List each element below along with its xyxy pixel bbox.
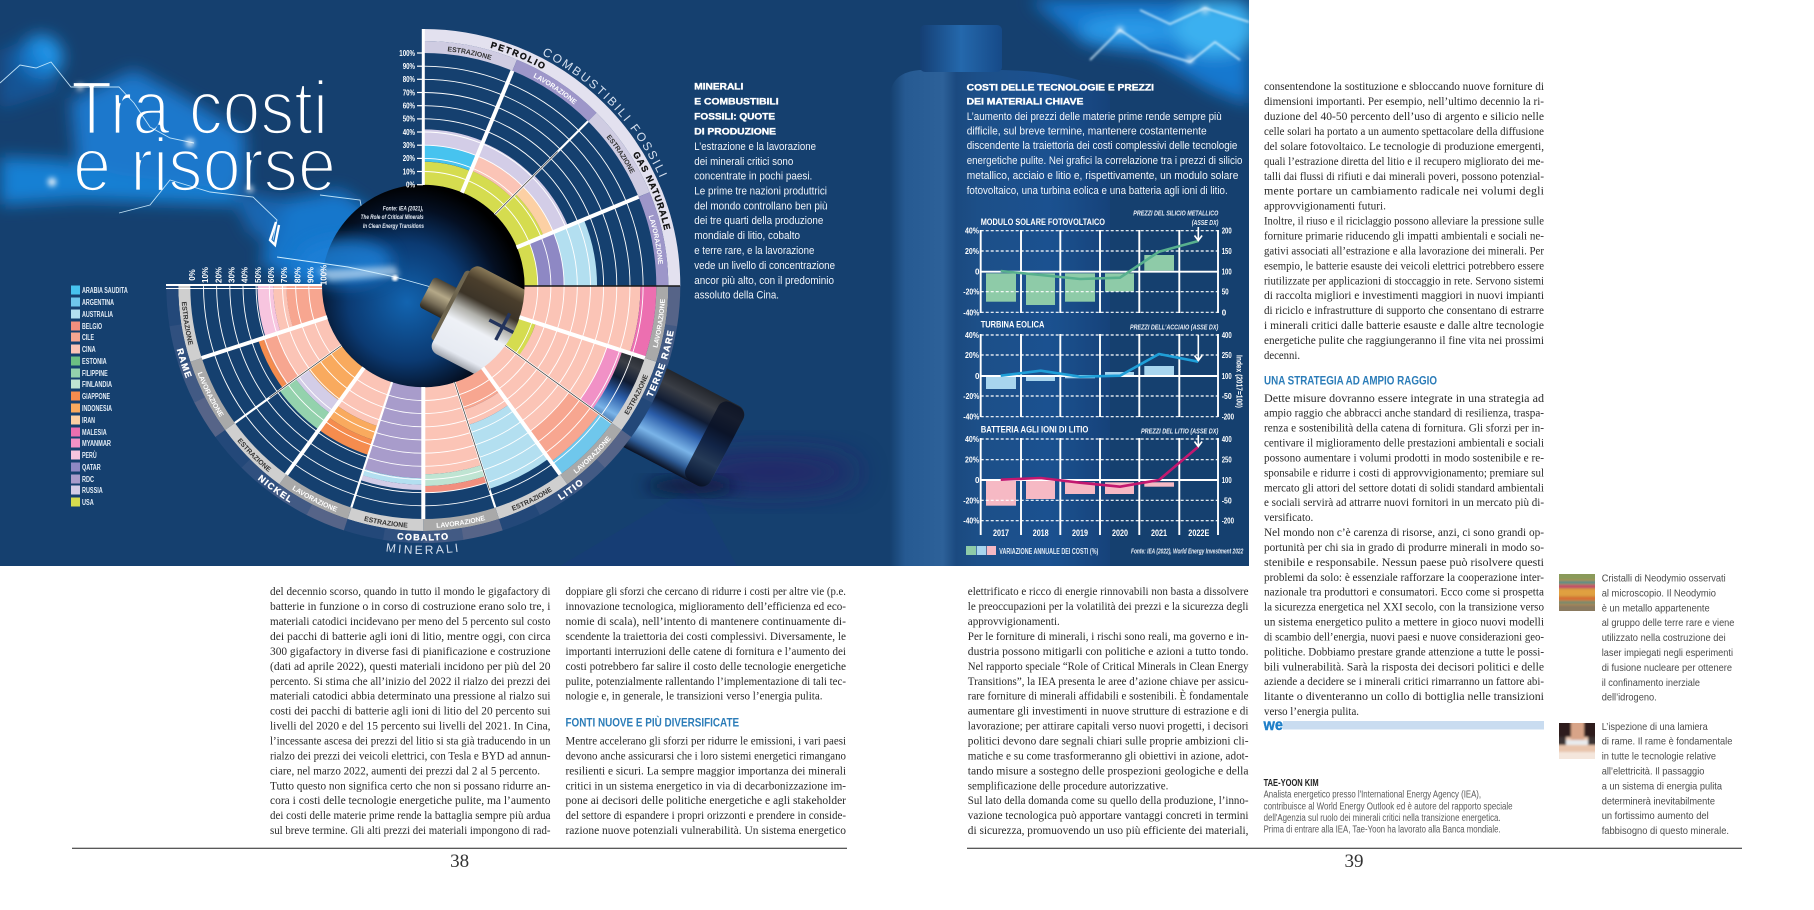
year labels <box>993 528 1209 538</box>
heading <box>694 82 779 138</box>
article text: page 39 column 2 top <box>1264 79 1545 362</box>
legend: countries: ARABIA SAUDITA <box>82 286 128 295</box>
article text: page 39 column 2 bottom: politiche. Dobbiamo prestare grande attenzione a tutte le possi- <box>1264 644 1544 658</box>
axis labels: lower percent scale: 30% <box>227 267 236 283</box>
rim labels: minerals: LAVORAZIONE <box>652 299 665 348</box>
footer page 38: 38 <box>450 851 469 872</box>
chart: batteria agli ioni di litio: BATTERIA AGLI IONI DI LITIO <box>981 424 1088 435</box>
axis labels: upper percent scale: 10% <box>403 167 415 176</box>
article text: page 39 column 2 bottom: Dette misure dovranno essere integrate in una strategia ad <box>1264 391 1544 405</box>
article text: page 38 column 2: del settore di espandere i propri orizzonti e prendere in conside- <box>566 808 846 822</box>
article text: page 38 column 1: costi dei pacchi di batterie agli ioni di litio del 20 percento sui <box>270 704 551 718</box>
article text: page 38 column 1: (dati ad aprile 2022), questi materiali incidono per più del 20 <box>270 659 550 673</box>
article text: page 39 column 2 top: Inoltre, il riuso e il riciclaggio possono alleviare la pressione sulle <box>1264 214 1544 228</box>
article text: page 39 column 2 bottom: aziende a decidere se i minerali critici rimarranno un fattore abi- <box>1264 674 1544 688</box>
body: L’aumento dei prezzi delle materie prime rende sempre più <box>967 111 1222 123</box>
article text: page 39 column 1: approvvigionamenti. <box>968 614 1060 628</box>
article text: page 39 column 2 bottom: problemi da solo: è essenziale rafforzare la cooperazione inter- <box>1264 570 1544 584</box>
article text: page 39 column 2 bottom: ampio raggio che abbracci anche standard di resilienza, traspa- <box>1264 406 1544 420</box>
chart: modulo solare fotovoltaico <box>963 209 1232 317</box>
article text: page 39 column 2 top: approvvigionamenti futuri. <box>1264 199 1386 213</box>
article text: page 39 column 1: tando misure a sostegno delle prospezioni geologiche e della <box>968 763 1249 777</box>
chart: turbina eolica <box>963 319 1234 422</box>
chart: modulo solare fotovoltaico: -40% <box>963 308 979 317</box>
author bio: Prima di entrare alla IEA, Tae-Yoon ha lavorato alla Banca mondiale. <box>1264 824 1501 836</box>
rim labels: fossil fuels: ESTRAZIONE <box>606 134 635 174</box>
segments: petrolio and gas naturale <box>213 76 634 496</box>
article text: page 39 column 2 bottom: portunità per chi sia in grado di produrre minerali in modo so- <box>1264 540 1544 554</box>
article text: page 38 column 2 <box>566 584 847 837</box>
footer page 39: 39 <box>1344 851 1364 872</box>
heading: fonti nuove: FONTI NUOVE E PIÙ DIVERSIFICATE <box>566 714 739 730</box>
axis labels: upper percent scale: 20% <box>403 154 415 163</box>
body: concentrate in pochi paesi. <box>694 170 812 182</box>
article text: page 39 column 2 top: di raccolta migliori e investimenti maggiori in nuovi impianti <box>1264 288 1545 302</box>
article text: page 39 column 2 bottom: renza e sostenibilità della catena di fornitura. Gli sforzi per in- <box>1264 421 1544 435</box>
article text: page 39 column 2 top: gativi associati all’estrazione e alla lavorazione dei minerali. Per <box>1264 243 1544 257</box>
author bio: TAE-YOON KIM <box>1264 778 1319 789</box>
chart: batteria agli ioni di litio: 0 <box>975 476 980 485</box>
article text: page 39 column 2 top: di riciclo e infrastrutture di supporto che consentano di estrarre <box>1264 303 1544 317</box>
year labels: 2018 <box>1033 528 1049 538</box>
article text: page 38 column 2: pone ai decisori delle politiche energetiche e agli stakeholder <box>566 793 846 807</box>
icon: battery <box>403 250 750 494</box>
legend: countries: AUSTRALIA <box>82 310 113 319</box>
rim labels: minerals: ESTRAZIONE <box>624 374 648 415</box>
article text: page 39 column 1: Sul lato della domanda come su quello della produzione, l’inno- <box>968 793 1249 807</box>
chart: modulo solare fotovoltaico: 150 <box>1222 247 1232 256</box>
article text: page 39 column 2 top: dimensioni importanti. Per esempio, nell’ultimo decennio la ri- <box>1264 94 1544 108</box>
article text: page 39 column 2 top: decenni. <box>1264 348 1300 362</box>
caption: neodymium: il confinamento inerziale <box>1602 677 1700 689</box>
title: Tra costi <box>71 66 328 151</box>
chart: modulo solare fotovoltaico: -20% <box>963 288 979 297</box>
body: L’estrazione e la lavorazione <box>694 141 816 153</box>
body: assoluto della Cina. <box>694 290 779 302</box>
article text: page 39 column 2 bottom: possono aumentare i volumi prodotti in modo sostenibile e re- <box>1264 450 1544 464</box>
caption: copper: in tutte le tecnologie relative <box>1602 751 1716 763</box>
legend: countries: QATAR <box>82 463 101 472</box>
legend: countries: USA <box>82 498 94 507</box>
article text: page 39 column 1: dustria possono mitigarli con politiche e azioni a tutto tondo. <box>968 644 1248 658</box>
author bio <box>1264 778 1513 836</box>
article text: page 38 column 1: cora i costi delle tecnologie energetiche pulite, ma l’aumento <box>270 793 550 807</box>
year labels: 2021 <box>1151 528 1167 538</box>
chart: turbina eolica: 250 <box>1222 351 1232 360</box>
lightning over hub <box>277 238 431 287</box>
rim labels: minerals: TERRE RARE <box>646 330 674 396</box>
article text: page 38 column 2: pulite, potenzialmente rallentando l’implementazione di tali tec- <box>566 674 846 688</box>
chart: batteria agli ioni di litio <box>963 424 1234 538</box>
article text: page 39 column 2 bottom: di scambio dell’energia, nuovi paesi e nuove considerazioni geo- <box>1264 630 1544 644</box>
article text: page 38 column 1: materiali catodici incidevano per meno del 5 percento sul costo <box>270 614 550 628</box>
chart legend <box>966 546 1244 556</box>
article text: page 38 column 2: resilienti e sicuri. La sempre maggior importanza dei minerali <box>566 763 847 777</box>
article text: page 38 column 1: 300 gigafactory in diverse fasi di pianificazione e costruzione <box>270 644 550 658</box>
lightning glow left <box>0 35 420 285</box>
article text: page 39 column 2 top: i minerali critici dalle batterie esauste e dalle altre tecnologie <box>1264 318 1544 332</box>
rim labels: fossil fuels: LAVORAZIONE <box>648 215 663 264</box>
article text: page 39 column 1: Per le forniture di minerali, i rischi sono reali, ma governo e in- <box>968 629 1249 643</box>
caption: neodymium: utilizzato nella costruzione dei <box>1602 632 1726 644</box>
rim labels: minerals: LAVORAZIONE <box>436 516 486 528</box>
article text: page 39 column 2 top: esempio, le batterie esauste dei veicoli elettrici potrebbero essere <box>1264 258 1544 272</box>
body: difficile, sul breve termine, mantenere costantemente <box>967 126 1207 138</box>
chart: turbina eolica: -200 <box>1222 413 1234 422</box>
chart: batteria agli ioni di litio: 250 <box>1222 456 1232 465</box>
article text: page 39 column 2 bottom <box>1264 391 1545 718</box>
article text: page 39 column 2 top: del solare fotovoltaico. Le tecnologie di produzione emergenti, <box>1264 139 1544 153</box>
rim labels: minerals: LAVORAZIONE <box>198 372 224 417</box>
article text: page 39 column 1: di sicurezza, promuovendo un uso più efficiente dei materiali, <box>968 823 1248 837</box>
photo: copper sheet inspection <box>1559 723 1595 759</box>
author bio: Analista energetico presso l'International Energy Agency (IEA), <box>1264 790 1481 800</box>
legend: countries: MALESIA <box>82 428 107 437</box>
chart: turbina eolica: 20% <box>965 351 979 360</box>
chart: turbina eolica: 0 <box>975 372 980 381</box>
article text: page 39 column 2 bottom: sponsabile e ridurre i costi di approvvigionamento; premiare sul <box>1264 465 1545 479</box>
legend: countries: ARGENTINA <box>82 298 114 307</box>
article text: page 39 column 2 bottom: la sicurezza energetica nel XXI secolo, con la transizione verso <box>1264 600 1544 614</box>
article text: page 38 column 1: materiali catodici abbia determinato una pressione al rialzo sui <box>270 689 551 703</box>
text block: costi delle tecnologie <box>967 82 1242 197</box>
axis labels: lower percent scale: 80% <box>293 267 302 283</box>
body: fotovoltaico, una turbina eolica e una batteria agli ioni di litio. <box>967 185 1228 197</box>
legend: countries: GIAPPONE <box>82 392 110 401</box>
rim labels: minerals: ESTRAZIONE <box>182 302 194 346</box>
heading: DI PRODUZIONE <box>694 126 776 138</box>
axis labels: lower percent scale: 100% <box>320 265 328 285</box>
photo: neodymium crystals <box>1559 574 1595 611</box>
heading: E COMBUSTIBILI <box>694 96 779 108</box>
caption: copper: L’ispezione di una lamiera <box>1602 721 1708 733</box>
article text: page 38 column 1: percento. Si stima che all’inizio del 2022 il rialzo dei prezzi dei <box>270 674 551 688</box>
body: ancor più alto, con il predominio <box>694 275 834 287</box>
chart: turbina eolica: TURBINA EOLICA <box>981 319 1045 330</box>
lightning glow top right <box>1030 0 1257 105</box>
article text: page 39 column 1: lavorazione; per attirare capitali verso nuovi progetti, i decisori <box>968 719 1249 733</box>
legend: countries: CILE <box>82 333 94 342</box>
rim labels: minerals: ESTRAZIONE <box>238 438 272 472</box>
caption: neodymium <box>1602 572 1735 704</box>
axis labels: upper percent scale <box>399 49 415 189</box>
body: metallico, acciaio e litio e, rispettivamente, un modulo solare <box>967 170 1238 182</box>
legend: countries <box>71 286 128 507</box>
axis labels: upper percent scale: 40% <box>403 128 415 137</box>
legend: countries: FILIPPINE <box>82 369 108 378</box>
chart: batteria agli ioni di litio: 20% <box>965 456 979 465</box>
caption: neodymium: al gruppo delle terre rare e viene <box>1602 617 1735 629</box>
heading: MINERALI <box>694 82 743 92</box>
caption: copper: determinerà inevitabilmente <box>1602 795 1715 807</box>
chart: modulo solare fotovoltaico: (ASSE DX) <box>1192 218 1219 227</box>
title <box>74 80 332 190</box>
heading: FOSSILI: QUOTE <box>694 112 775 122</box>
article text: page 38 column 2: nologie e, in generale, le transizioni verso l’energia pulita. <box>566 689 822 703</box>
article text: page 38 column 2: nomie di scala), nell’intento di mantenere continuamente di- <box>566 614 846 628</box>
axis labels: lower percent scale: 90% <box>306 267 315 283</box>
caption: copper: di rame. Il rame è fondamentale <box>1602 736 1733 748</box>
article text: page 39 column 2 bottom: verso l’energia pulita. <box>1264 704 1359 718</box>
chart: modulo solare fotovoltaico: 20% <box>965 247 979 256</box>
article text: page 39 column 2 bottom: un sistema energetico pulito a mettere in gioco nuovi modelli <box>1264 615 1545 629</box>
chart: modulo solare fotovoltaico: 50 <box>1222 288 1229 297</box>
rim labels: fossil fuels: ESTRAZIONE <box>448 46 492 60</box>
chart legend: VARIAZIONE ANNUALE DEI COSTI (%) <box>999 547 1099 556</box>
article text: page 39 column 1: le preoccupazioni per la volatilità dei prezzi e la sicurezza degli <box>968 599 1249 613</box>
chart: batteria agli ioni di litio: 40% <box>965 435 979 444</box>
axis labels: lower percent scale: 40% <box>240 267 249 283</box>
chart: batteria agli ioni di litio: -40% <box>963 517 979 526</box>
article text: page 39 column 2 top: talli dai flussi di rifiuti e dai minerali poveri, possono potenzial- <box>1264 169 1544 183</box>
heading: una strategia: UNA STRATEGIA AD AMPIO RAGGIO <box>1264 374 1437 388</box>
article text: page 38 column 1: livelli del 2020 e del 15 percento sui livelli del 2021. In Cina, <box>270 719 550 733</box>
rim: fossil fuels <box>85 0 761 624</box>
heading: DEI MATERIALI CHIAVE <box>967 96 1083 108</box>
article text: page 39 column 2 bottom: mercato gli attori del settore dotati di solidi standard ambientali <box>1264 480 1545 494</box>
article text: page 38 column 2: importanti interruzioni delle catene di fornitura e l’aumento dei <box>566 644 847 658</box>
article text: page 39 column 1 <box>968 584 1249 837</box>
year labels: 2019 <box>1072 528 1088 538</box>
caption: neodymium: Cristalli di Neodymio osservati <box>1602 572 1726 584</box>
rim labels: minerals: MINERALI <box>386 543 458 554</box>
reflection and shadow <box>644 440 862 504</box>
caption: neodymium: è un metallo appartenente <box>1602 602 1710 614</box>
rim labels: fossil fuels <box>448 42 670 264</box>
chart: turbina eolica: 40% <box>965 331 979 340</box>
source note in hub: Fonte: IEA (2021), <box>383 206 423 212</box>
article text: page 39 column 2 bottom: bili vulnerabilità. Sarà la risposta dei decisori politici e delle <box>1264 659 1544 673</box>
article text: page 38 column 2: razione nuove potenziali vulnerabilità. Un sistema energetico <box>566 823 846 837</box>
caption: copper: all’elettricità. Il passaggio <box>1602 766 1705 778</box>
article text: page 39 column 1: matiche e su come trasformeranno gli obiettivi in azione, adot- <box>968 748 1248 762</box>
logo bar: we: we <box>1263 717 1283 734</box>
article text: page 38 column 1: dei costi delle materie prime rende la battaglia sempre più ardua <box>270 808 551 822</box>
body <box>694 141 835 302</box>
axis labels: lower percent scale: 10% <box>201 267 210 283</box>
chart: modulo solare fotovoltaico: 200 <box>1222 227 1232 236</box>
axis labels: upper percent scale: 0% <box>406 180 415 190</box>
axis labels: lower percent scale: 50% <box>254 267 263 283</box>
article text: page 39 column 2 bottom: stenibile e responsabile. Nessun paese può risolvere questi <box>1264 555 1545 569</box>
rim labels: minerals <box>176 299 674 554</box>
article text: page 38 column 2: Mentre accelerano gli sforzi per ridurre le emissioni, i vari paesi <box>566 734 847 748</box>
panel: blue photo background <box>0 0 1257 566</box>
logo bar: we <box>1263 717 1544 734</box>
battery column page 39 <box>890 25 1110 566</box>
rim labels: minerals: LAVORAZIONE <box>573 436 611 474</box>
article text: page 39 column 2 bottom: versificato. <box>1264 510 1313 524</box>
article text: page 38 column 2: innovazione tecnologica, miglioramento dell’efficienza ed eco- <box>566 599 846 613</box>
article text: page 38 column 1: batterie in funzione o in corso di costruzione erano solo tre, i <box>270 599 551 613</box>
article text: page 39 column 1: Nel rapporto speciale “Role of Critical Minerals in Clean Energy <box>968 659 1248 673</box>
source note in hub: In Clean Energy Transitions <box>363 223 424 230</box>
chart: batteria agli ioni di litio: -50 <box>1222 496 1232 505</box>
body: dei tre quarti della produzione <box>694 215 823 227</box>
caption: copper: a un sistema di energia pulita <box>1602 780 1722 792</box>
chart: turbina eolica: 100 <box>1222 372 1232 381</box>
article text: page 39 column 2 bottom: centivare il miglioramento delle prestazioni ambientali e sociali <box>1264 436 1545 450</box>
rim labels: minerals: ESTRAZIONE <box>512 486 552 511</box>
rim labels: minerals: ESTRAZIONE <box>364 516 408 528</box>
article text: page 39 column 1: semplificazione delle procedure autorizzative. <box>968 778 1168 792</box>
caption: copper: un fortissimo aumento del <box>1602 810 1709 822</box>
rim labels: fossil fuels: LAVORAZIONE <box>534 73 577 104</box>
article text: page 38 column 1: del decennio scorso, quando in tutto il mondo le gigafactory di <box>270 584 551 598</box>
article text: page 38 column 2: scendente la traiettoria dei costi complessivi. Diversamente, le <box>566 629 846 643</box>
rim labels: fossil fuels: GAS NATURALE <box>634 152 670 230</box>
rim labels: fossil fuels: PETROLIO <box>490 42 545 68</box>
chart: turbina eolica: PREZZI DELL'ACCIAIO (ASSE DX) <box>1130 323 1219 332</box>
article text: page 39 column 2 top: forniture primarie riducendo gli impatti ambientali e sociali ne- <box>1264 228 1544 242</box>
article text: page 39 column 1: aumentare gli investimenti in nuove strutture di estrazione e di <box>968 704 1249 718</box>
axis labels: lower percent scale <box>188 265 328 285</box>
chart: modulo solare fotovoltaico: 100 <box>1222 268 1232 277</box>
segments: minerals <box>109 0 738 600</box>
body: mondiale di litio, cobalto <box>694 230 800 242</box>
chart: batteria agli ioni di litio: 100 <box>1222 476 1232 485</box>
article text: page 39 column 2 top: duzione del 40-50 percento dell’uso di argento e silicio nelle <box>1264 109 1544 123</box>
caption: neodymium: al microscopio. Il Neodymio <box>1602 587 1716 599</box>
legend: countries: MYANMAR <box>82 439 111 448</box>
axis labels: upper percent scale: 50% <box>403 115 415 124</box>
chart: modulo solare fotovoltaico: 40% <box>965 227 979 236</box>
rim labels: minerals: NICKEL <box>258 474 290 503</box>
author bio: contribuisce al World Energy Outlook ed è autore del rapporto speciale <box>1264 802 1513 812</box>
chart: batteria agli ioni di litio: -200 <box>1222 517 1234 526</box>
article text: page 39 column 2 top: mente portare un cambiamento radicale nei volumi degli <box>1264 184 1545 198</box>
chart legend: Fonte: IEA (2022), World Energy Investment 2022 <box>1131 546 1244 556</box>
article text: page 39 column 1: elettrificato e ricco di energie rinnovabili non basta a dissolvere <box>968 584 1248 598</box>
axis labels: upper percent scale: 90% <box>403 62 415 71</box>
chart: turbina eolica: 400 <box>1222 331 1232 340</box>
axis labels: lower percent scale: 70% <box>280 267 289 283</box>
legend: countries: IRAN <box>82 416 95 425</box>
article text: page 38 column 2: doppiare gli sforzi che cercano di ridurre i costi per altre vie (p.e. <box>566 584 846 598</box>
rim labels: minerals: LAVORAZIONE <box>292 486 338 512</box>
article text: page 38 column 1: rialzo dei prezzi dei veicoli elettrici, con Tesla e BYD ad annun- <box>270 748 551 762</box>
legend: countries: ESTONIA <box>82 357 107 366</box>
year labels: 2020 <box>1112 528 1128 538</box>
body: discendente la traiettoria dei costi complessivi delle tecnologie <box>967 140 1237 152</box>
article text: page 39 column 1: rare forniture di minerali affidabili e sostenibili. È fondamentale <box>968 689 1248 703</box>
article text: page 39 column 1: Transitions”, la IEA presenta le aree d’azione chiave per assicu- <box>968 674 1248 688</box>
chart: turbina eolica: -20% <box>963 392 979 401</box>
article text: page 38 column 1: Tutto questo non significa certo che non si possano ridurre an- <box>270 778 550 792</box>
body: del mondo controllano ben più <box>694 200 828 212</box>
article text: page 38 column 1: dei pacchi di batterie agli ioni di litio, mentre oggi, con circa <box>270 629 551 643</box>
body: dei minerali critici sono <box>694 156 793 168</box>
year labels: 2017 <box>993 528 1009 538</box>
article text: page 38 column 1: l’incessante ascesa dei prezzi del litio si sta già traducendo in un <box>270 734 550 748</box>
hub circle <box>322 184 525 388</box>
axis labels: upper percent scale: 30% <box>403 141 415 150</box>
chart: turbina eolica: -50 <box>1222 392 1232 401</box>
legend: countries: CINA <box>82 345 96 354</box>
article text: page 38 column 2: critici in un sistema energetico in via di decarbonizzazione im- <box>566 778 846 792</box>
axis title: index: Index (2017=100) <box>1234 355 1244 408</box>
chart: batteria agli ioni di litio: 400 <box>1222 435 1232 444</box>
axis labels: lower percent scale: 20% <box>214 267 223 283</box>
legend: countries: RUSSIA <box>82 486 103 495</box>
axis labels: upper percent scale: 60% <box>403 102 415 110</box>
rim labels: minerals: LITIO <box>558 480 582 500</box>
caption: neodymium: laser impiegati negli esperimenti <box>1602 647 1733 659</box>
article text: page 39 column 1: vazione tecnologica può apportare vantaggi concreti in termini <box>968 808 1249 822</box>
legend: countries: PERÙ <box>82 451 97 460</box>
chart axes: separators <box>166 29 680 288</box>
article text: page 38 column 2: costi potrebbero far salire il costo delle tecnologie energetiche <box>566 659 846 673</box>
legend: countries: FINLANDIA <box>82 380 112 389</box>
body: vede un livello di concentrazione <box>694 260 835 272</box>
legend: countries: RDC <box>82 475 94 484</box>
article text: page 39 column 2 bottom: e sociali servirà ad attrarre nuovi fornitori in un mercato più di- <box>1264 495 1544 509</box>
chart: batteria agli ioni di litio: -20% <box>963 496 979 505</box>
chart: batteria agli ioni di litio: PREZZI DEL LITIO (ASSE DX) <box>1141 426 1219 435</box>
year labels: 2022E <box>1188 528 1209 538</box>
article text: page 39 column 2 top: consentendone la sostituzione e sbloccando nuove forniture di <box>1264 79 1545 93</box>
article text: page 39 column 2 bottom: Nel mondo non c’è carenza di risorse, anzi, ci sono grandi op- <box>1264 525 1544 539</box>
body <box>967 111 1242 197</box>
caption: copper: fabbisogno di questo minerale. <box>1602 825 1729 837</box>
body: Le prime tre nazioni produttrici <box>694 186 827 198</box>
rim labels: fossil fuels: COMBUSTIBILI FOSSILI <box>544 48 667 177</box>
source note in hub <box>361 206 424 230</box>
legend: countries: BELGIO <box>82 322 102 331</box>
article text: page 39 column 2 bottom: litante o diventeranno un collo di bottiglia nelle transizioni <box>1264 689 1545 703</box>
article text: page 39 column 2 bottom: nazionale tra produttori e consumatori. Ecco come si prospetta <box>1264 585 1545 599</box>
caption: neodymium: dell’idrogeno. <box>1602 692 1657 704</box>
article text: page 38 column 2: devono anche assicurarsi che i loro sistemi energetici rimangano <box>566 748 846 762</box>
axis labels: upper percent scale: 100% <box>399 49 415 58</box>
article text: page 39 column 2 top: quali l’estrazione diretta del litio e il recupero migliorato dei me- <box>1264 154 1544 168</box>
article text: page 38 column 1: sul breve termine. Gli alti prezzi dei materiali impongono di rad- <box>270 823 550 837</box>
text block: minerali e combustibili fossili <box>694 82 835 302</box>
heading <box>967 82 1154 108</box>
rim labels: minerals: COBALTO <box>397 533 448 541</box>
heading: COSTI DELLE TECNOLOGIE E PREZZI <box>967 82 1154 94</box>
chart: modulo solare fotovoltaico: 0 <box>1222 308 1227 317</box>
legend: countries: INDONESIA <box>82 404 112 413</box>
body: e terre rare, e la lavorazione <box>694 245 814 257</box>
body: energetiche pulite. Nei grafici la correlazione tra i prezzi di silicio <box>967 155 1242 167</box>
caption: copper <box>1602 721 1733 837</box>
rim: minerals <box>68 0 778 641</box>
author bio: dell'Agenzia sul ruolo dei minerali critici nella transizione energetica. <box>1264 813 1501 824</box>
title: e risorse <box>73 123 336 208</box>
article text: page 39 column 1: politici devono dare segnali chiari sulle proprie ambizioni cli- <box>968 734 1248 748</box>
chart: turbina eolica: -40% <box>963 413 979 422</box>
radial chart: minerals and fossil fuels <box>166 29 680 554</box>
article text: page 39 column 2 top: riutilizzate per applicazioni di stoccaggio in rete. Servono sistemi <box>1264 273 1545 287</box>
rim labels: minerals: RAME <box>176 348 192 378</box>
article text: page 39 column 2 top: energetiche pulite che raggiungeranno il fine vita nei prossimi <box>1264 333 1545 347</box>
article text: page 38 column 1 <box>270 584 551 837</box>
chart: modulo solare fotovoltaico: MODULO SOLARE FOTOVOLTAICO <box>981 217 1105 228</box>
axis labels: lower percent scale: 60% <box>267 267 276 283</box>
article text: page 38 column 1: ciare, nel marzo 2022, aumenti dei prezzi dal 2 al 5 percento. <box>270 763 540 777</box>
axis labels: lower percent scale: 0% <box>188 269 197 281</box>
chart: modulo solare fotovoltaico: 0 <box>975 268 980 277</box>
caption: neodymium: di fusione nucleare per ottenere <box>1602 662 1732 674</box>
axis labels: upper percent scale: 80% <box>403 75 415 84</box>
chart: modulo solare fotovoltaico: PREZZI DEL SILICIO METALLICO <box>1133 209 1218 218</box>
article text: page 39 column 2 top: celle solari ha portato a un aumento spettacolare della diffusione <box>1264 124 1544 138</box>
source note in hub: The Role of Critical Minerals <box>361 214 424 221</box>
axis labels: upper percent scale: 70% <box>403 88 415 97</box>
